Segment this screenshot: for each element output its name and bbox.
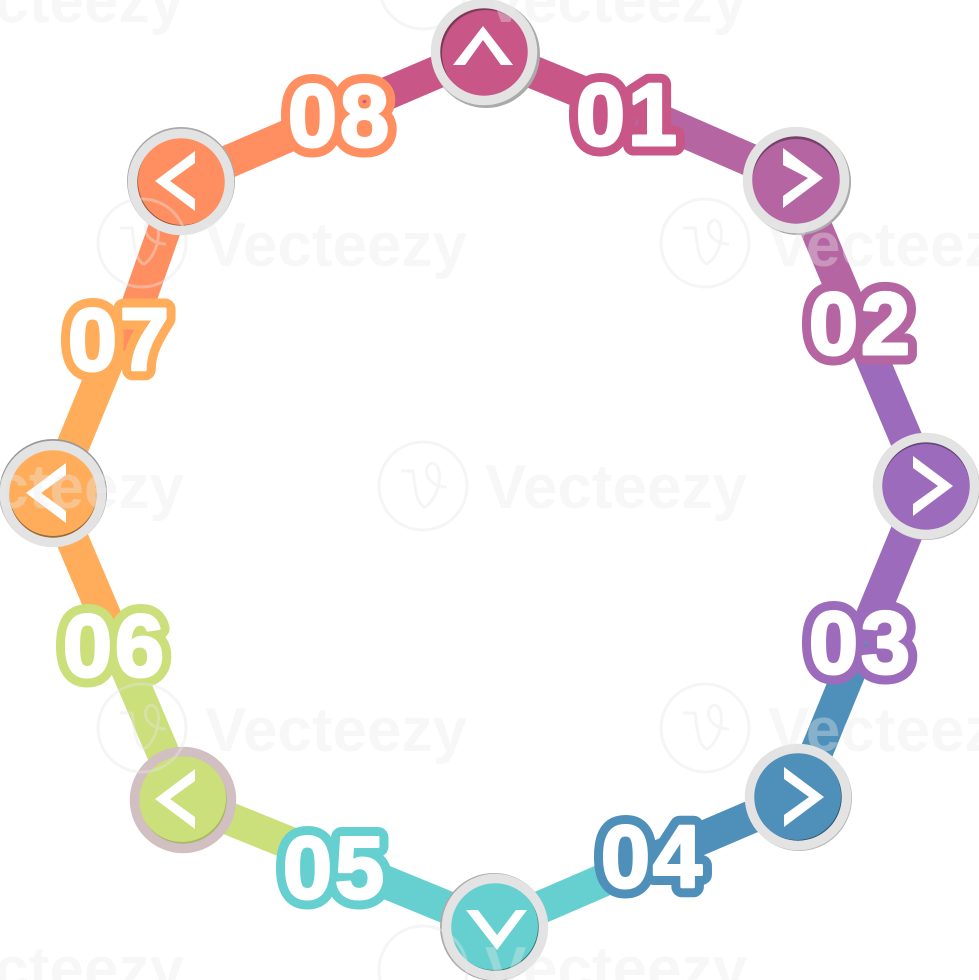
label 03: 03 [809,593,913,692]
label 08: 08 [288,66,392,165]
node 1: up arrow [432,0,540,108]
label 02: 02 [809,274,913,373]
node 4: right arrow [746,745,852,851]
label 04: 04 [601,807,705,906]
node 8: left arrow [127,127,235,235]
label 03: 03 [809,593,913,692]
node 3: right arrow [874,434,979,540]
label 02: 02 [809,274,913,373]
label 07: 07 [68,290,172,389]
node 7: left arrow [0,439,107,547]
node 5: down arrow [440,873,548,980]
label 01: 01 [576,65,680,164]
watermark: Vecteezy [485,453,748,522]
label 07: 07 [68,290,172,389]
node 2: right arrow [745,129,851,235]
label 04: 04 [601,807,705,906]
label 08: 08 [288,66,392,165]
node 6: left arrow [130,747,236,853]
ring band segments [53,52,926,927]
watermark: Vecteezy [205,696,468,765]
label 05: 05 [283,818,387,917]
watermark: Vecteezy [205,211,468,280]
label 01: 01 [576,65,680,164]
label 06: 06 [63,596,167,695]
label 06: 06 [63,596,167,695]
label 05: 05 [283,818,387,917]
